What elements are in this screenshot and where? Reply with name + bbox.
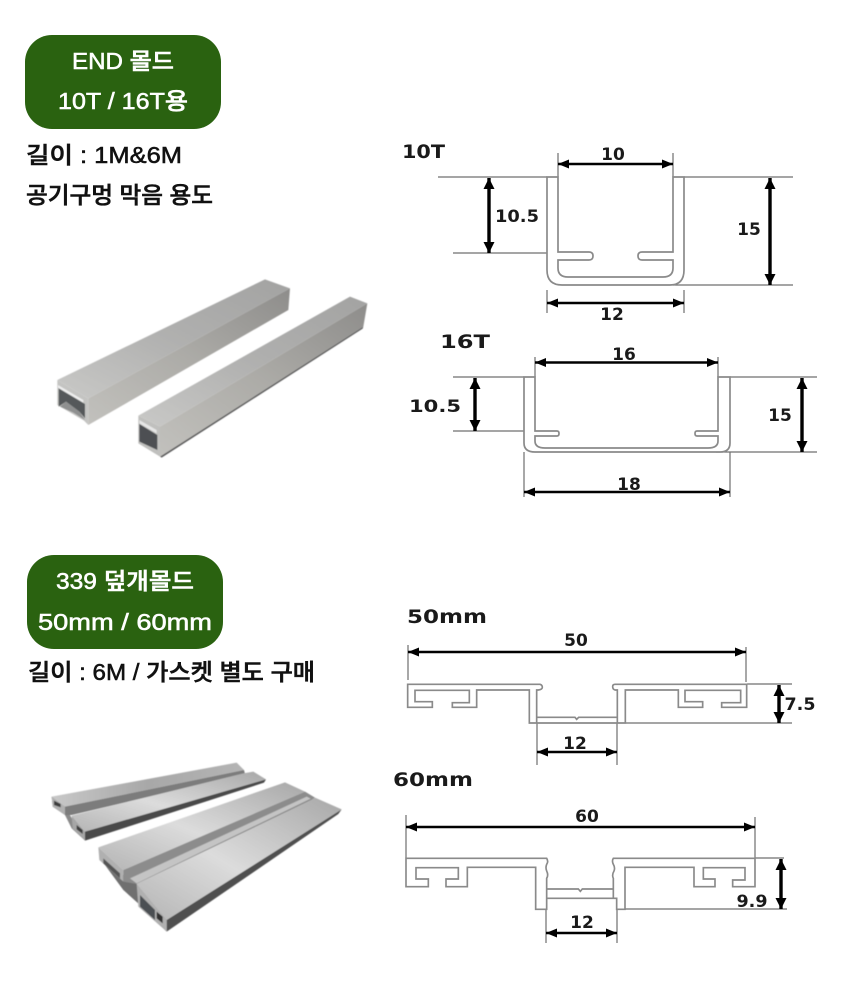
section diagram: 10T profile: 15 <box>737 220 761 240</box>
label: 16T: 16T <box>440 331 490 353</box>
section diagram: 16T profile <box>409 331 817 497</box>
text block: length and purpose of END mould: 공기구멍 막음 용도 <box>26 182 213 208</box>
label: 10T: 10T <box>402 141 445 163</box>
label: 60mm: 60mm <box>393 769 473 791</box>
product photo: cover mould aluminium panels <box>52 763 342 932</box>
product photo: END mould aluminium bars <box>57 279 367 458</box>
section diagram: 60mm profile <box>393 769 787 943</box>
section diagram: 10T profile: 10.5 <box>495 207 539 227</box>
label: 50mm: 50mm <box>407 606 487 628</box>
section diagram: 16T profile: 18 <box>617 475 641 495</box>
section diagram: 10T profile: 10 <box>601 145 625 165</box>
section diagram: 16T profile: 16 <box>612 345 636 365</box>
section diagram: 50mm profile: 50 <box>564 631 588 651</box>
section diagram: 60mm profile: 60 <box>575 807 599 827</box>
section diagram: 10T profile: 12 <box>600 305 624 325</box>
section diagram: 50mm profile: 7.5 <box>784 695 816 715</box>
section diagram: 50mm profile <box>407 606 816 765</box>
text block: length and purpose of END mould: 길이 : 1M&6M <box>26 142 182 168</box>
heading badge: 339 덮개몰드 50mm / 60mm <box>27 555 223 649</box>
section diagram: 16T profile: 10.5 <box>409 397 461 417</box>
heading badge: 339 덮개몰드 50mm / 60mm: 50mm / 60mm <box>38 609 212 635</box>
heading badge: END 몰드 10T / 16T용: END 몰드 <box>72 48 174 74</box>
heading badge: END 몰드 10T / 16T용: 10T / 16T용 <box>58 88 188 114</box>
section diagram: 10T profile <box>402 141 793 325</box>
text block: length of cover mould: 길이 : 6M / 가스켓 별도 구매 <box>28 659 315 685</box>
section diagram: 16T profile: 15 <box>768 406 792 426</box>
heading badge: 339 덮개몰드 50mm / 60mm: 339 덮개몰드 <box>56 568 194 594</box>
section diagram: 50mm profile: 12 <box>563 734 587 754</box>
section diagram: 60mm profile: 9.9 <box>736 892 768 912</box>
section diagram: 60mm profile: 12 <box>570 913 594 933</box>
heading badge: END 몰드 10T / 16T용 <box>25 35 221 129</box>
text block: length and purpose of END mould <box>26 142 213 208</box>
